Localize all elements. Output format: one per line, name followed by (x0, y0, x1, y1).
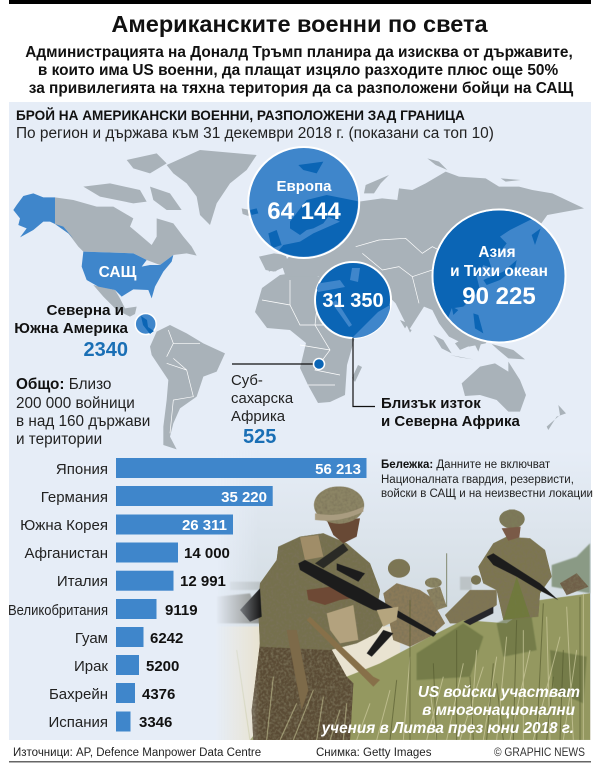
bar UK: 9119 (165, 602, 198, 619)
Europe bubble: 64 144 (267, 198, 341, 225)
Eurasia (259, 158, 584, 347)
distant vehicles (217, 593, 262, 623)
bar Afghanistan (24, 542, 230, 562)
bar Italy: 12 991 (180, 573, 226, 590)
bar Italy: Италия (57, 573, 108, 590)
map heading: БРОЙ НА АМЕРИКАНСКИ ВОЕННИ, РАЗПОЛОЖЕНИ ЗАД ГРАНИЦА (16, 108, 465, 123)
total note: и територии (16, 431, 102, 448)
Sub-Saharan label: Африка (231, 409, 286, 425)
bar UK: Великобритания (8, 602, 108, 619)
bar Afghanistan: Афганистан (24, 545, 108, 562)
photo caption: учения в Литва през юни 2018 г. (321, 720, 574, 737)
bar Guam (75, 627, 183, 647)
main soldier torso (258, 533, 390, 650)
bar UK (8, 599, 198, 619)
Middle East label: и Северна Африка (381, 413, 521, 430)
Asia-Pacific bubble (432, 208, 566, 344)
Asia-Pacific bubble: и Тихи океан (450, 263, 548, 280)
Middle East label: Близък изток (381, 395, 481, 412)
grass (250, 593, 590, 740)
photo left fade (215, 508, 258, 740)
map heading: По регион и държава към 31 декември 2018 г. (показани са топ 10) (16, 125, 494, 142)
total note: Общо: Близо (16, 376, 111, 393)
Europe bubble: Европа (277, 178, 332, 195)
USA (13, 193, 173, 298)
note: войски в САЩ и на неизвестни локации (381, 488, 593, 500)
subtitle: в които има US военни, да плащат изцяло разходите плюс още 50% (38, 62, 558, 79)
note: Националната гвардия, резервисти, (381, 474, 574, 486)
photo caption: в многонационални (422, 702, 576, 719)
total note (16, 376, 150, 448)
title: Американските военни по света (111, 11, 489, 37)
photo (218, 486, 591, 740)
bar Guam: 6242 (150, 630, 183, 647)
subtitle (25, 44, 574, 97)
bar Germany: Германия (41, 489, 108, 506)
world map (13, 150, 584, 449)
total note: в над 160 държави (16, 413, 150, 430)
bar Bahrain: 4376 (142, 686, 175, 703)
bar South Korea: 26 311 (182, 517, 227, 534)
Australia and islands (400, 320, 566, 430)
rifle (298, 560, 437, 637)
Sub-Saharan label (231, 373, 294, 448)
footer: Източници: AP, Defence Manpower Data Centre (13, 747, 261, 759)
bar Spain: Испания (48, 714, 108, 731)
Middle East bubble: 31 350 (322, 290, 384, 312)
bar Germany (41, 486, 273, 506)
bar Bahrain (49, 683, 175, 703)
note (381, 459, 593, 500)
bar Japan (56, 458, 366, 478)
bar Afghanistan: 14 000 (184, 545, 230, 562)
Sub-Saharan marker (232, 358, 324, 370)
footer: © GRAPHIC NEWS (494, 747, 585, 759)
beach (234, 626, 400, 702)
Europe bubble (248, 147, 360, 258)
middle soldiers (383, 559, 588, 647)
photo caption (321, 684, 580, 737)
bar Iraq (74, 655, 179, 675)
USA label: САЩ (99, 264, 137, 281)
total note: 200 000 войници (16, 395, 135, 412)
map heading (16, 108, 494, 142)
bar South Korea: Южна Корея (20, 517, 108, 534)
treeline (552, 543, 590, 593)
subtitle: за привилегията на тяхна територия да са разположени бойци на САЩ (29, 80, 574, 97)
sling (307, 617, 380, 687)
Middle East label (381, 395, 521, 430)
bar Guam: Гуам (75, 630, 108, 647)
Asia-Pacific bubble: Азия (478, 244, 516, 261)
bar Spain: 3346 (139, 714, 172, 731)
bar Japan: 56 213 (315, 461, 361, 478)
bar South Korea (20, 514, 233, 534)
bar Bahrain: Бахрейн (49, 686, 108, 703)
footer: Снимка: Getty Images (316, 747, 432, 759)
bar Spain (48, 712, 172, 732)
hand and glove (307, 587, 352, 605)
foreground grass (237, 650, 347, 740)
Africa (255, 272, 355, 403)
Sub-Saharan label: сахарска (231, 391, 294, 407)
South America (150, 325, 225, 449)
strap (315, 543, 348, 568)
Middle East bubble (315, 262, 391, 345)
bar Germany: 35 220 (221, 489, 267, 506)
bar Japan: Япония (56, 461, 108, 478)
bar Iraq: 5200 (146, 658, 179, 675)
bar Iraq: Ирак (74, 658, 108, 675)
Middle East leader (353, 338, 375, 406)
note: Бележка: Данните не включват (381, 459, 551, 471)
photo caption: US войски участват (418, 684, 580, 701)
main soldier legs (252, 643, 353, 740)
Americas bubble (135, 314, 156, 334)
top rule (9, 0, 591, 4)
bar Italy (57, 571, 226, 591)
bar chart (8, 458, 366, 732)
Sub-Saharan label: 525 (243, 426, 276, 448)
Americas label (14, 302, 129, 361)
main soldier head (327, 518, 360, 543)
Asia-Pacific bubble: 90 225 (462, 283, 536, 310)
Americas label: Северна и (47, 302, 124, 319)
Sub-Saharan label: Суб- (231, 373, 263, 389)
Americas label: Южна Америка (14, 320, 129, 337)
right soldier (478, 510, 552, 620)
subtitle: Администрацията на Доналд Тръмп планира да изисква от държавите, (25, 44, 573, 61)
footer (9, 747, 591, 762)
Americas label: 2340 (84, 339, 128, 361)
